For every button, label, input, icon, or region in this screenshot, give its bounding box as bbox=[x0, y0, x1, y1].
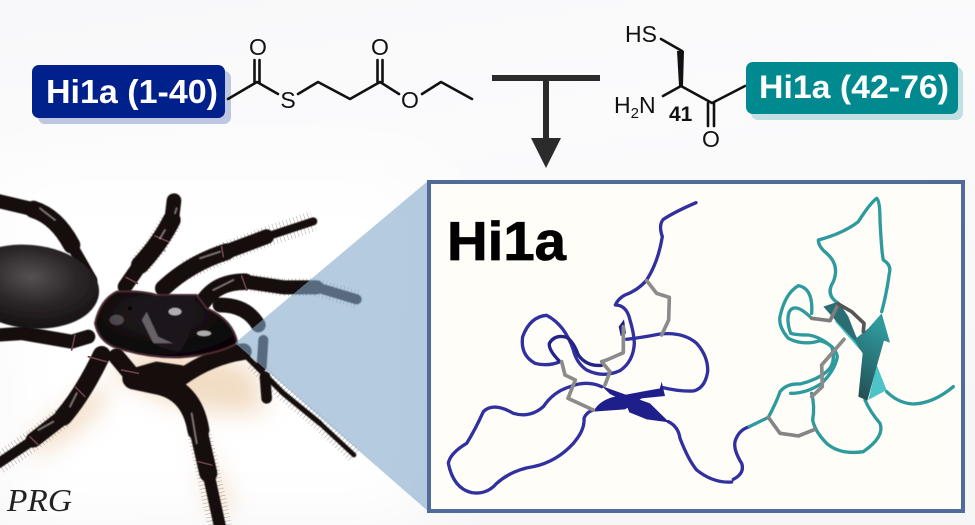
amine label: N bbox=[639, 92, 656, 118]
carapace front bbox=[130, 296, 195, 352]
cysteine structure bbox=[614, 21, 745, 152]
carapace highlights bbox=[109, 308, 211, 343]
blue ribbon back loops bbox=[448, 203, 732, 493]
left peptide label: Hi1a (1-40) bbox=[46, 73, 218, 110]
disulfide bonds bbox=[562, 281, 669, 410]
ligation arrow bbox=[492, 75, 600, 168]
oxygen and sulfur atoms: S bbox=[280, 87, 296, 113]
amine label: H bbox=[614, 92, 631, 118]
amine label: 2 bbox=[631, 105, 639, 122]
oxygen and sulfur atoms: O bbox=[401, 87, 419, 113]
spider abdomen bbox=[0, 238, 103, 335]
disulfide bonds bbox=[768, 304, 864, 436]
right peptide label: Hi1a (42-76) bbox=[759, 69, 949, 105]
white photo backdrop bbox=[0, 170, 430, 525]
leg highlights bbox=[38, 208, 233, 443]
residue number: 41 bbox=[669, 103, 693, 126]
photo credit: PRG bbox=[6, 482, 72, 518]
teal chain: residues 42-76 bbox=[733, 198, 953, 479]
teal beta strands bbox=[823, 302, 890, 401]
thioester structure bbox=[228, 34, 472, 113]
oxygen and sulfur atoms bbox=[249, 34, 419, 113]
thioester bonds bbox=[228, 60, 472, 99]
right peptide tag shadow bbox=[751, 67, 963, 120]
blue chain: residues 1-40 bbox=[448, 203, 732, 493]
left peptide tag bbox=[32, 65, 225, 118]
cysteine bonds bbox=[661, 39, 745, 126]
left peptide tag shadow bbox=[38, 71, 231, 124]
photo: funnel-web spider bbox=[0, 201, 357, 525]
panel: Hi1a structure bbox=[429, 182, 963, 511]
spider eyes bbox=[128, 306, 132, 310]
stereo wedge bbox=[677, 51, 684, 86]
thiol label: HS bbox=[625, 21, 657, 47]
leg joints bbox=[30, 236, 247, 465]
magnification wedge bbox=[235, 180, 429, 512]
linker bbox=[733, 427, 749, 479]
oxygen and sulfur atoms: O bbox=[371, 34, 389, 60]
spider legs bbox=[0, 201, 357, 525]
panel frame bbox=[429, 182, 963, 511]
spider shadow bbox=[30, 347, 267, 513]
leg hairs bbox=[0, 220, 357, 525]
teal ribbon loops bbox=[749, 198, 953, 452]
spider carapace bbox=[95, 291, 237, 357]
oxygen and sulfur atoms: O bbox=[249, 34, 267, 60]
blue beta strands bbox=[593, 319, 669, 422]
carbonyl oxygen: O bbox=[702, 126, 720, 152]
right peptide tag bbox=[746, 62, 958, 114]
panel heading: Hi1a bbox=[447, 210, 566, 272]
